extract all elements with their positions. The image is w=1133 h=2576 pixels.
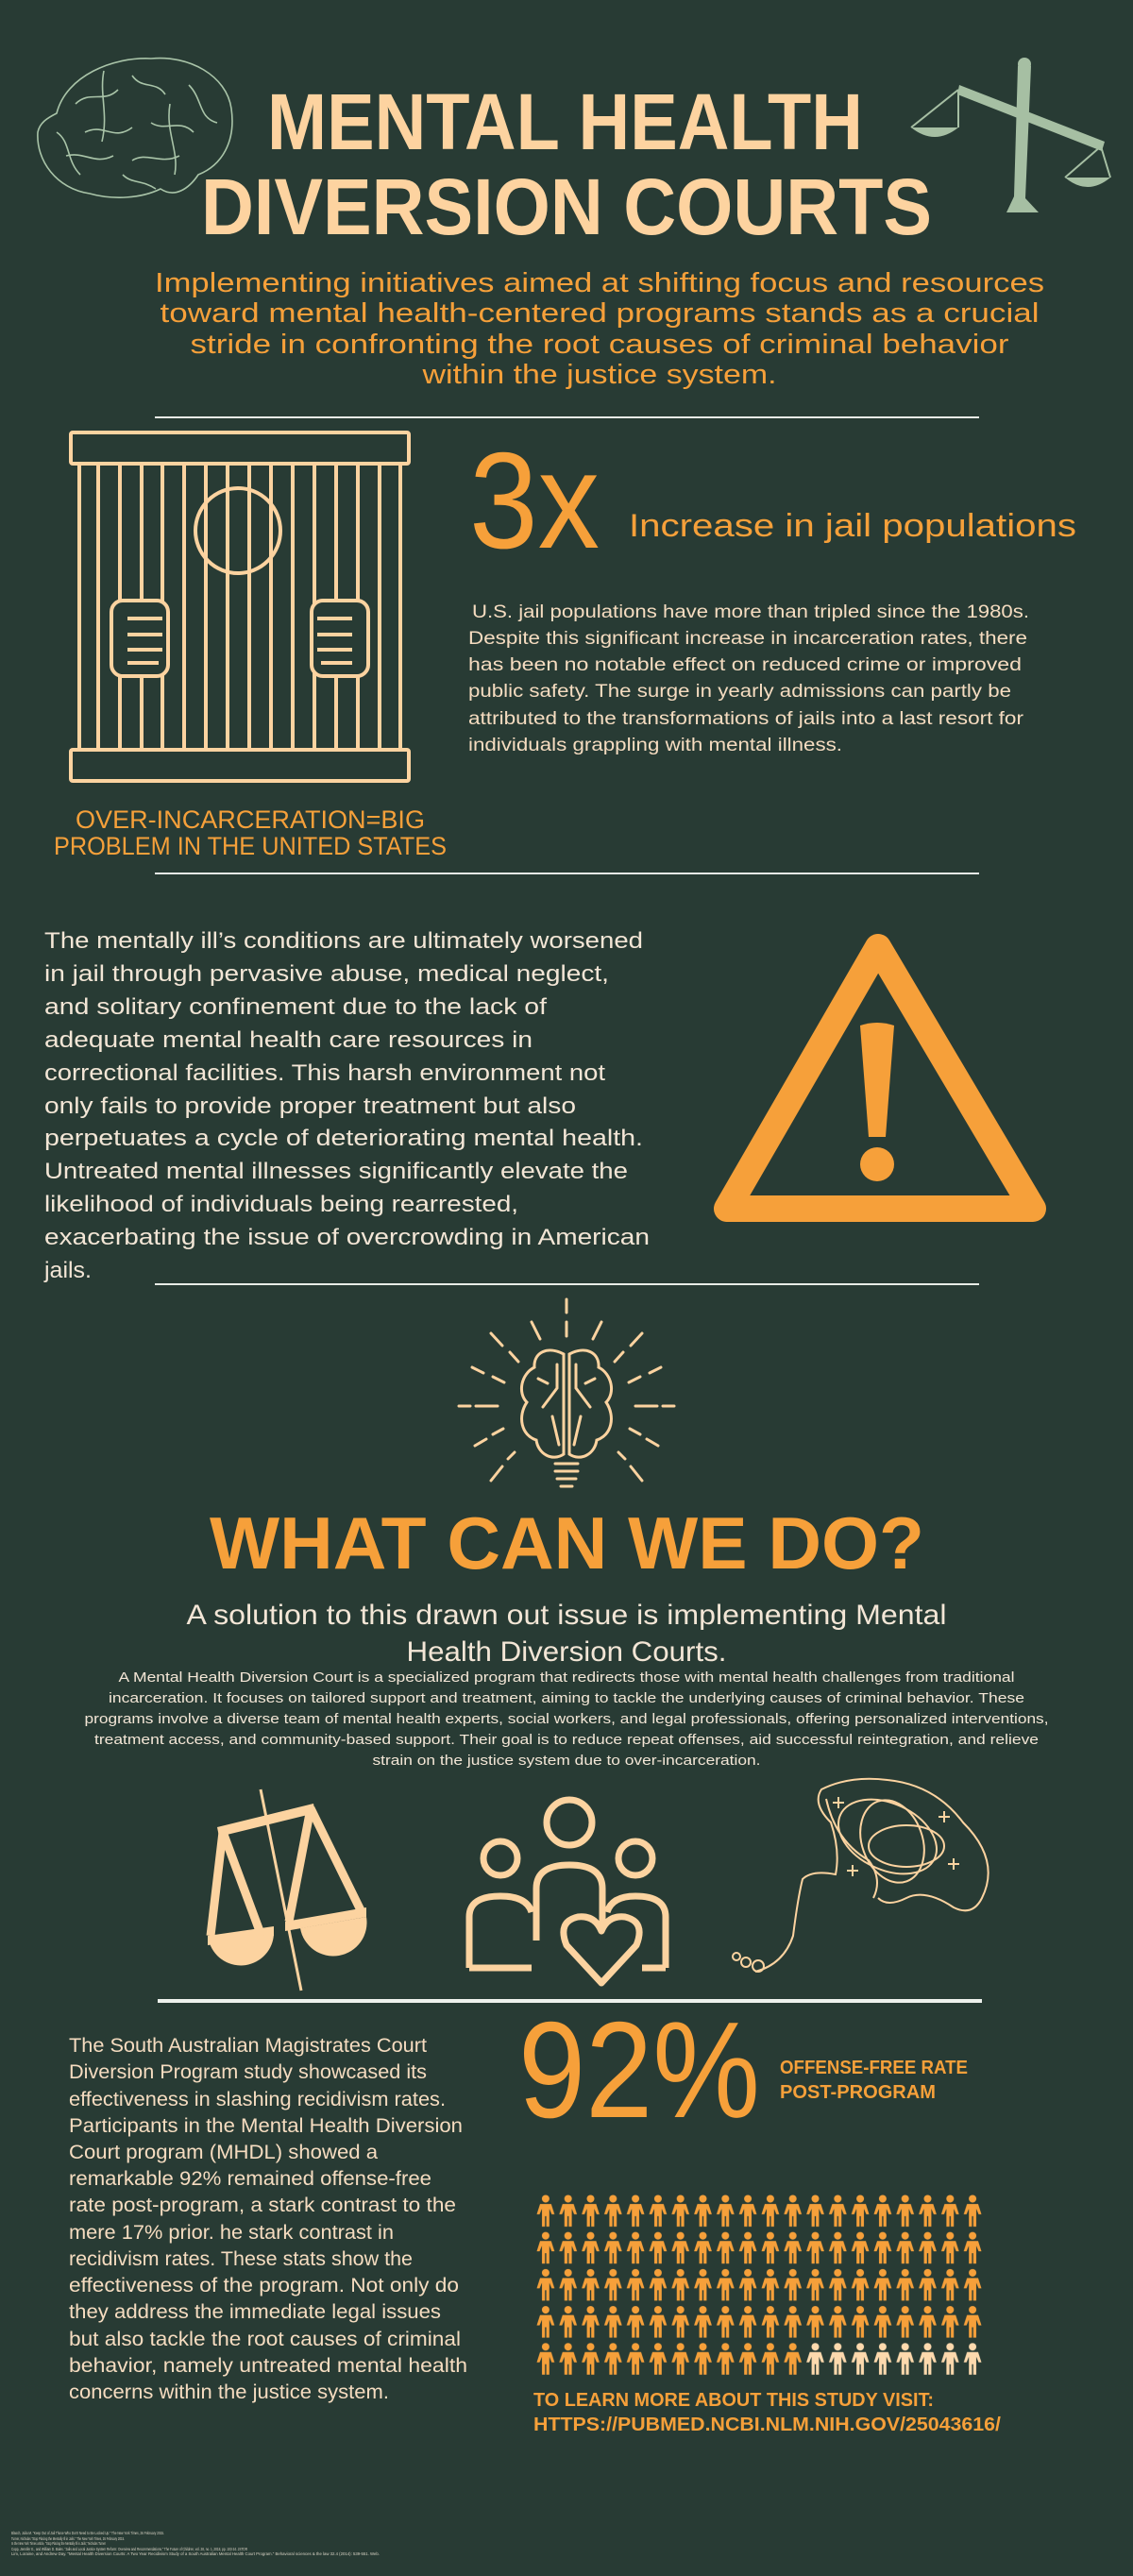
text: sources: Turner, Nicholas "Stop Placing the Mentally Ill in Jails." The New York Times, 26 February 2015.: [11, 2536, 125, 2541]
text: jail populations paragraph: [468, 602, 1029, 755]
icon: scales: [208, 1789, 367, 1991]
text: mental illness in jail paragraph: adequate mental health care resources in: [44, 1027, 533, 1053]
icon: tangled thoughts: [733, 1779, 989, 1972]
text: South Australian study paragraph: behavior, namely untreated mental health: [69, 2355, 467, 2377]
text: jail populations paragraph: attributed to the transformations of jails into a last resort for: [468, 709, 1024, 729]
text: jail populations paragraph: individuals grappling with mental illness.: [468, 736, 842, 755]
text: mental illness in jail paragraph: and solitary confinement due to the lack of: [44, 994, 547, 1020]
text: mental illness in jail paragraph: jails.: [43, 1258, 92, 1283]
text: diversion court description: A Mental Health Diversion Court is a specialized program that redirects those with mental health challenges from traditional: [119, 1669, 1014, 1686]
text: South Australian study paragraph: mere 17% prior. he stark contrast in: [69, 2222, 394, 2244]
text: jail populations paragraph: Despite this significant increase in incarceration rates, there: [468, 629, 1027, 649]
heading: what can we do: WHAT CAN WE DO?: [210, 1501, 924, 1585]
icon: jail bars: [71, 432, 409, 781]
text: South Australian study paragraph: recidivism rates. These stats show the: [69, 2248, 413, 2270]
text: South Australian study paragraph: Participants in the Mental Health Diversion: [69, 2115, 463, 2137]
icon: brain sketch: [38, 59, 232, 197]
title: DIVERSION COURTS: [201, 162, 932, 251]
text: diversion court description: [85, 1669, 1048, 1769]
caption: over-incarceration: OVER-INCARCERATION=BIG: [76, 805, 425, 834]
text: learn more link: [533, 2390, 1001, 2435]
text: jail populations paragraph: U.S. jail populations have more than tripled since the 1980s.: [472, 602, 1029, 622]
text: South Australian study paragraph: Court program (MHDL) showed a: [69, 2142, 378, 2163]
text: South Australian study paragraph: Diversion Program study showcased its: [69, 2061, 427, 2083]
subtitle: toward mental health-centered programs stands as a crucial: [161, 298, 1039, 329]
text: mental illness in jail paragraph: [43, 928, 650, 1283]
text: solution: A solution to this drawn out issue is implementing Mental: [187, 1600, 946, 1631]
icon: warning triangle: [727, 947, 1033, 1209]
text: South Australian study paragraph: The South Australian Magistrates Court: [69, 2035, 427, 2057]
stat: 3x: [469, 424, 1076, 577]
text: mental illness in jail paragraph: in jail through pervasive abuse, medical neglect,: [44, 961, 609, 987]
text: diversion court description: programs involve a diverse team of mental health experts, social workers, and legal professionals, offering personalized interventions,: [85, 1711, 1048, 1727]
text: South Australian study paragraph: effectiveness of the program. Not only do: [69, 2275, 459, 2296]
subtitle: [155, 268, 1044, 390]
text: sources: Copp, Jennifer E., and William D. Bales. "Jails and Local Justice System Reform: Overview and Recommendations." The Future of Children, vol. 28, no. 1, 2018, pp. 103-24. JSTOR: [11, 2547, 248, 2551]
text: South Australian study paragraph: [69, 2035, 467, 2403]
subtitle: within the justice system.: [421, 360, 776, 390]
text: sources: Blasch, Julia M. "Keep Out of Jail Those Who Don't Need to Be Locked Up." The New York Times, 26 February 2015.: [11, 2531, 164, 2535]
title: [201, 77, 932, 251]
stat: 92%: OFFENSE-FREE RATE: [780, 2058, 968, 2078]
chart: 100-person pictogram (92 orange): [534, 2195, 984, 2380]
text: jail populations paragraph: has been no notable effect on reduced crime or improved: [468, 655, 1022, 675]
subtitle: stride in confronting the root causes of criminal behavior: [191, 330, 1009, 360]
text: diversion court description: treatment access, and community-based support. Their goal is to reduce repeat offenses, aid successful reintegration, and relieve: [94, 1732, 1039, 1748]
text: South Australian study paragraph: they address the immediate legal issues: [69, 2301, 441, 2323]
icon: brain lightbulb: [459, 1299, 674, 1486]
text: solution: [187, 1600, 946, 1668]
text: South Australian study paragraph: concerns within the justice system.: [69, 2381, 389, 2403]
text: sources: [11, 2531, 380, 2556]
title: MENTAL HEALTH: [267, 77, 863, 166]
icon: people with heart: [469, 1800, 666, 1983]
text: diversion court description: incarceration. It focuses on tailored support and treatment, aiming to tackle the underlying causes of criminal behavior. These: [109, 1690, 1024, 1706]
stat: 92%: POST-PROGRAM: [780, 2082, 936, 2103]
text: mental illness in jail paragraph: exacerbating the issue of overcrowding in American: [44, 1225, 650, 1250]
icon: scales of justice (top right): [911, 58, 1110, 212]
text: learn more link: HTTPS://PUBMED.NCBI.NLM.NIH.GOV/25043616/: [533, 2415, 1001, 2435]
text: sources: In the New York Times article, "Stop Placing the Mentally Ill in Jails," Nicholas Turner: [11, 2541, 106, 2546]
caption: over-incarceration: PROBLEM IN THE UNITED STATES: [54, 832, 447, 860]
text: South Australian study paragraph: effectiveness in slashing recidivism rates.: [69, 2089, 446, 2110]
text: solution: Health Diversion Courts.: [406, 1636, 727, 1668]
text: mental illness in jail paragraph: Untreated mental illnesses significantly elevate the: [44, 1159, 628, 1184]
text: mental illness in jail paragraph: correctional facilities. This harsh environment not: [44, 1060, 605, 1086]
subtitle: Implementing initiatives aimed at shifting focus and resources: [155, 268, 1044, 298]
text: diversion court description: strain on the justice system due to over-incarceration.: [372, 1753, 761, 1769]
text: South Australian study paragraph: but also tackle the root causes of criminal: [69, 2329, 461, 2350]
text: South Australian study paragraph: remarkable 92% remained offense-free: [69, 2168, 431, 2190]
text: jail populations paragraph: public safety. The surge in yearly admissions can partly be: [468, 682, 1011, 702]
text: sources: Lim, Loraine, and Andrew Day. "Mental Health Diversion Courts: A Two Year Recidivism Study of a South Australian Mental Health Court Program." Behavioral sciences & the law 32.4 (2014): 539-551. Web.: [11, 2551, 380, 2556]
text: mental illness in jail paragraph: perpetuates a cycle of deteriorating mental health.: [44, 1126, 643, 1151]
stat: 3x: Increase in jail populations: [629, 508, 1076, 544]
text: mental illness in jail paragraph: The mentally ill’s conditions are ultimately worsened: [44, 928, 643, 954]
text: mental illness in jail paragraph: only fails to provide proper treatment but also: [44, 1093, 576, 1119]
stat: 92%: 92%: [518, 1993, 760, 2146]
text: learn more link: TO LEARN MORE ABOUT THIS STUDY VISIT:: [533, 2390, 934, 2411]
text: South Australian study paragraph: rate post-program, a stark contrast to the: [69, 2195, 456, 2216]
caption: over-incarceration: [54, 805, 447, 860]
stat: 92%: [518, 1993, 968, 2146]
text: mental illness in jail paragraph: likelihood of individuals being rearrested,: [44, 1192, 518, 1217]
stat: 3x: 3x: [469, 424, 600, 577]
